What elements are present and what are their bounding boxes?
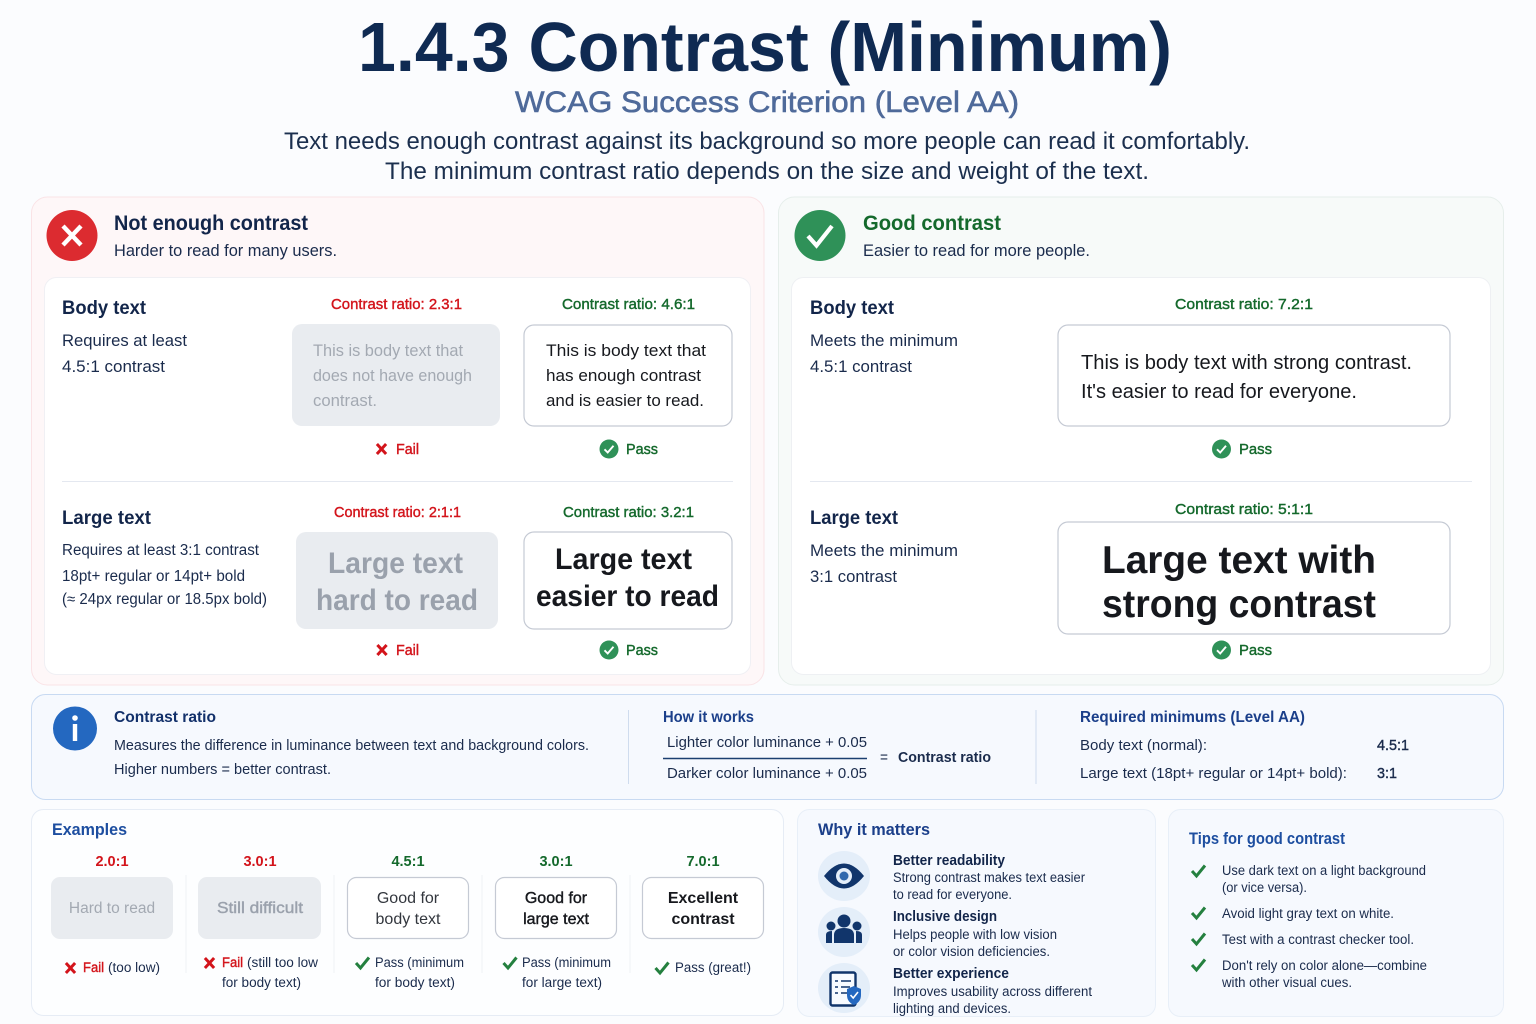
body text description: 4.5:1 contrast — [810, 357, 912, 376]
required minimums: Large text (18pt+ regular or 14pt+ bold): — [1080, 765, 1347, 782]
reason: better experience: Better experience — [893, 966, 1009, 982]
example: 4.5:1: Good for — [377, 890, 440, 907]
tip: test with checker: Test with a contrast checker tool. — [1222, 932, 1414, 947]
passing body text sample: Pass — [626, 441, 658, 458]
tip: dark text on light: (or vice versa). — [1222, 880, 1307, 895]
icon: red cross — [46, 210, 98, 261]
example: 7.0:1: 7.0:1 — [686, 854, 720, 870]
tip: dark text on light — [1192, 863, 1426, 895]
reason: inclusive design: Helps people with low vision — [893, 927, 1057, 942]
large text description: Large text — [62, 508, 152, 529]
example: 3.0:1 pass: for large text) — [522, 975, 602, 990]
reason: better experience: lighting and devices. — [893, 1001, 1011, 1016]
passing large text sample: easier to read — [536, 580, 719, 613]
panel: examples — [32, 810, 784, 1016]
example: 7.0:1: Excellent — [668, 890, 739, 907]
large text description: 18pt+ regular or 14pt+ bold — [62, 568, 245, 585]
example: 4.5:1: 4.5:1 — [391, 854, 425, 870]
strong large text sample: Large text with — [1102, 539, 1376, 582]
formula: how it works: Darker color luminance + 0.05 — [667, 765, 867, 782]
reason: better readability: to read for everyone. — [893, 887, 1012, 902]
example: 3.0:1 pass — [496, 854, 616, 990]
example: 3.0:1 fail: 3.0:1 — [243, 854, 277, 870]
formula: how it works: Contrast ratio — [898, 750, 991, 766]
example: 3.0:1 fail: Fail — [222, 955, 243, 970]
large text description: Large text — [810, 508, 899, 529]
intro text — [284, 128, 1250, 185]
formula: how it works: = — [880, 749, 888, 766]
strong body text sample: It's easier to read for everyone. — [1081, 380, 1357, 403]
panel: good contrast — [778, 197, 1504, 685]
failing body text sample: This is body text that — [313, 341, 463, 360]
contrast ratio definition: Contrast ratio — [114, 709, 216, 726]
large text description — [810, 508, 958, 586]
tip: avoid light gray: Avoid light gray text on white. — [1222, 906, 1394, 921]
example: 3.0:1 pass: Good for — [525, 890, 588, 907]
passing large text sample: Large text — [555, 543, 692, 576]
tip: dark text on light: Use dark text on a light background — [1222, 863, 1426, 878]
passing large text sample: Pass — [626, 642, 658, 659]
failing body text sample: Contrast ratio: 2.3:1 — [331, 296, 462, 313]
required minimums: 4.5:1 — [1377, 737, 1409, 754]
example: 7.0:1: contrast — [671, 911, 735, 928]
body text description: Requires at least — [62, 331, 187, 350]
heading: tips: Tips for good contrast — [1189, 830, 1345, 848]
icon: device checklist with shield — [818, 963, 870, 1013]
passing body text sample: and is easier to read. — [546, 391, 704, 410]
strong body text sample: Pass — [1239, 441, 1272, 458]
title: 1.4.3 Contrast (Minimum) — [358, 8, 1172, 86]
text: harder to read: Harder to read for many users. — [114, 241, 337, 260]
body text description: Meets the minimum — [810, 331, 958, 350]
icon: people — [818, 907, 870, 957]
passing body text sample: Contrast ratio: 4.6:1 — [562, 296, 695, 313]
failing large text sample: Large text — [328, 547, 463, 580]
body text description — [62, 298, 187, 376]
text: easier to read: Easier to read for more people. — [863, 241, 1090, 260]
example: 4.5:1: Pass (minimum — [375, 955, 464, 970]
contrast ratio definition: Higher numbers = better contrast. — [114, 761, 331, 778]
contrast ratio definition: Measures the difference in luminance between text and background colors. — [114, 737, 589, 754]
panel: contrast ratio info band — [32, 694, 1504, 800]
example: 2.0:1: (too low) — [108, 960, 160, 975]
example: 3.0:1 fail — [198, 854, 321, 990]
required minimums: Body text (normal): — [1080, 737, 1207, 754]
intro text: Text needs enough contrast against its background so more people can read it comfortably. — [284, 128, 1250, 155]
passing body text sample: This is body text that — [546, 341, 706, 360]
strong body text sample: This is body text with strong contrast. — [1081, 351, 1412, 374]
failing large text sample: Fail — [396, 642, 419, 659]
icon: green check — [794, 210, 846, 261]
tip: not color alone: Don't rely on color alone—combine — [1222, 958, 1427, 973]
passing large text sample: Contrast ratio: 3.2:1 — [563, 504, 694, 521]
strong large text sample: Contrast ratio: 5:1:1 — [1175, 501, 1313, 518]
strong large text sample: Pass — [1239, 642, 1272, 659]
body text description: 4.5:1 contrast — [62, 357, 165, 376]
example: 4.5:1: for body text) — [375, 975, 455, 990]
example: 7.0:1 — [642, 854, 764, 975]
subtitle: WCAG Success Criterion (Level AA) — [515, 86, 1019, 119]
failing body text sample — [292, 296, 500, 458]
heading: good contrast: Good contrast — [863, 212, 1001, 235]
body text description — [810, 298, 958, 376]
passing large text sample — [524, 504, 732, 660]
inner card — [44, 278, 750, 674]
reason: better experience: Improves usability across different — [893, 984, 1092, 999]
example: 3.0:1 pass: 3.0:1 — [539, 854, 573, 870]
failing large text sample — [296, 504, 498, 659]
panel: tips for good contrast — [1168, 810, 1504, 1016]
strong large text sample — [1058, 501, 1450, 660]
panel: why it matters — [798, 810, 1156, 1016]
required minimums — [1080, 709, 1409, 782]
inner card — [792, 278, 1490, 674]
strong body text sample: Contrast ratio: 7.2:1 — [1175, 296, 1313, 313]
large text description: Requires at least 3:1 contrast — [62, 542, 260, 559]
example: 3.0:1 pass: large text — [523, 911, 589, 928]
reason: better experience — [893, 966, 1092, 1016]
failing body text sample: does not have enough — [313, 366, 472, 385]
reason: inclusive design: Inclusive design — [893, 909, 997, 925]
example: 3.0:1 fail: for body text) — [222, 975, 301, 990]
strong body text sample — [1058, 296, 1450, 458]
example: 3.0:1 fail: Still difficult — [217, 900, 304, 917]
formula: how it works: Lighter color luminance + 0.05 — [667, 734, 867, 751]
icon: info — [53, 706, 97, 750]
failing body text sample: Fail — [396, 441, 419, 458]
passing body text sample — [524, 296, 732, 458]
passing body text sample: has enough contrast — [546, 366, 701, 385]
body text description: Body text — [810, 298, 895, 319]
large text description — [62, 508, 267, 608]
body text description: Body text — [62, 298, 147, 319]
heading: why it matters: Why it matters — [818, 821, 930, 839]
reason: better readability: Better readability — [893, 853, 1005, 869]
failing large text sample: hard to read — [316, 584, 478, 617]
contrast ratio definition — [114, 709, 589, 778]
large text description: Meets the minimum — [810, 541, 958, 560]
large text description: (≈ 24px regular or 18.5px bold) — [62, 591, 267, 608]
example: 4.5:1: body text — [376, 911, 441, 928]
example: 3.0:1 pass: Pass (minimum — [522, 955, 611, 970]
required minimums: Required minimums (Level AA) — [1080, 709, 1305, 726]
large text description: 3:1 contrast — [810, 567, 897, 586]
heading: examples: Examples — [52, 821, 127, 839]
reason: inclusive design: or color vision deficiencies. — [893, 944, 1050, 959]
example: 7.0:1: Pass (great!) — [675, 960, 751, 975]
strong large text sample: strong contrast — [1102, 583, 1376, 626]
tip: not color alone: with other visual cues. — [1221, 975, 1352, 990]
icon: eye — [818, 851, 870, 901]
reason: inclusive design — [893, 909, 1057, 959]
reason: better readability — [893, 853, 1085, 902]
example: 2.0:1 — [51, 854, 173, 975]
failing body text sample: contrast. — [313, 391, 377, 410]
heading: not enough contrast: Not enough contrast — [114, 212, 308, 235]
formula: how it works: How it works — [663, 709, 754, 726]
tip: not color alone — [1192, 958, 1427, 990]
intro text: The minimum contrast ratio depends on the size and weight of the text. — [385, 158, 1149, 185]
example: 3.0:1 fail: (still too low — [247, 955, 318, 970]
example: 2.0:1: 2.0:1 — [95, 854, 129, 870]
formula: how it works — [663, 709, 991, 782]
example: 4.5:1 — [348, 854, 468, 990]
example: 2.0:1: Fail — [83, 960, 104, 975]
failing large text sample: Contrast ratio: 2:1:1 — [334, 504, 461, 521]
reason: better readability: Strong contrast makes text easier — [893, 870, 1085, 885]
required minimums: 3:1 — [1377, 765, 1397, 782]
panel: not enough contrast — [32, 197, 764, 685]
example: 2.0:1: Hard to read — [69, 900, 155, 917]
